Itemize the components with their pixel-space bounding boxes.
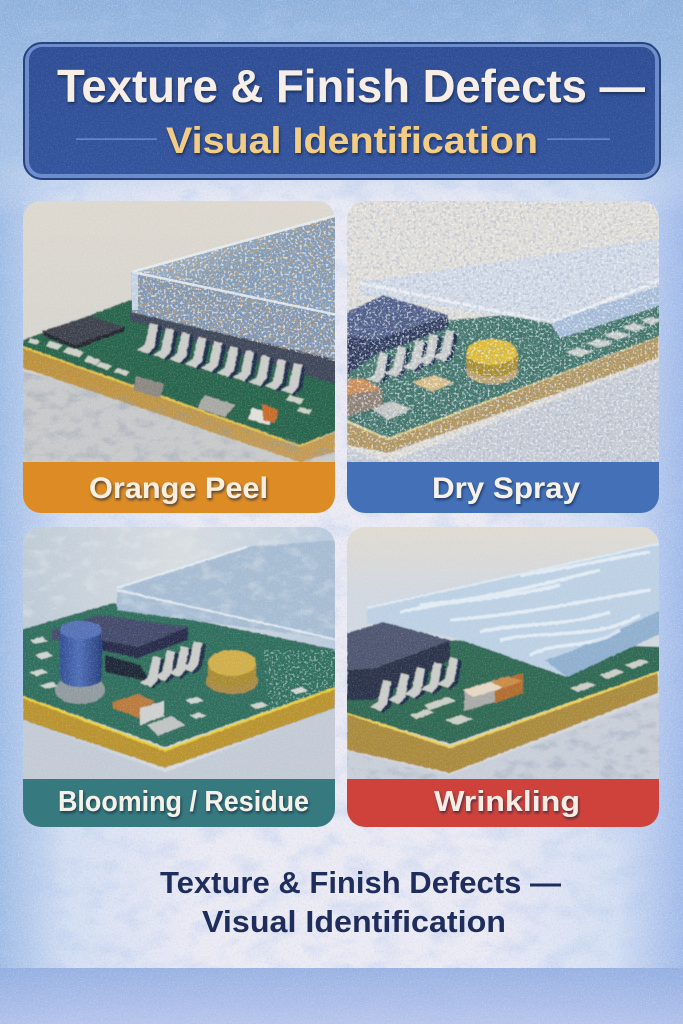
image: wrinkling circuit board [344, 524, 662, 782]
image: blooming circuit board [20, 524, 338, 782]
title panel [24, 43, 660, 179]
panel: blooming / residue [20, 524, 338, 827]
footer line 1: Texture & Finish Defects — [160, 865, 561, 900]
image: dry spray circuit board [344, 198, 662, 466]
title rule right [547, 138, 610, 140]
texture overlay on cards [23, 201, 659, 779]
label: orange peel: Orange Peel [89, 472, 268, 505]
title rule left [76, 138, 157, 140]
label: blooming / residue [23, 779, 335, 827]
title line 2: Visual Identification [166, 120, 538, 161]
footer line 2: Visual Identification [202, 904, 506, 939]
panel: wrinkling [344, 524, 662, 827]
title line 1: Texture & Finish Defects — [57, 60, 645, 112]
bottom band [0, 968, 683, 1024]
label: orange peel [23, 462, 335, 513]
label: dry spray: Dry Spray [432, 472, 580, 505]
label: wrinkling: Wrinkling [434, 786, 580, 818]
panel: dry spray [344, 198, 662, 513]
label: dry spray [347, 462, 659, 513]
footer caption [160, 865, 561, 939]
label: wrinkling [347, 779, 659, 827]
panel: orange peel [20, 198, 338, 513]
label: blooming / residue: Blooming / Residue [58, 786, 309, 818]
image: orange peel circuit board [20, 198, 338, 466]
